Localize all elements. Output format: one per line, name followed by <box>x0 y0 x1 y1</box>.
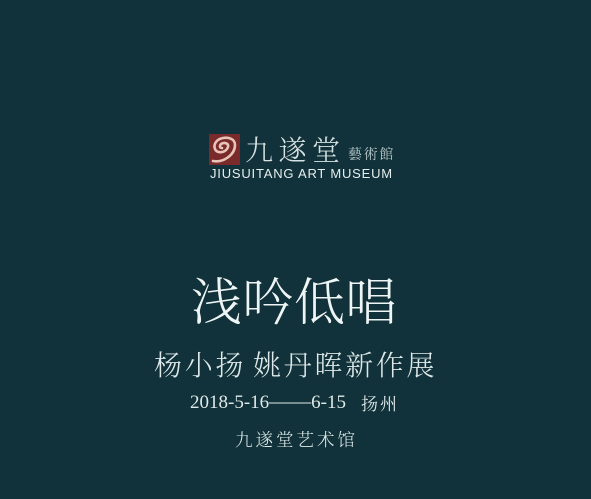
exhibition dates and city <box>190 389 399 415</box>
logo English name: JIUSUITANG ART MUSEUM <box>210 166 393 181</box>
museum logo <box>209 129 395 181</box>
exhibition dates and city: 扬州 <box>361 390 399 415</box>
title: 浅吟低唱 <box>191 261 397 335</box>
icon: red seal with spiral <box>209 134 240 165</box>
subtitle: artists: 杨小扬 姚丹晖新作展 <box>154 344 437 384</box>
exhibition dates and city: 2018-5-16——6-15 <box>190 389 346 413</box>
logo calligraphy: 九遂堂 <box>245 129 346 169</box>
venue: 九遂堂艺术馆 <box>235 427 358 452</box>
logo small characters: 藝術館 <box>348 144 395 164</box>
